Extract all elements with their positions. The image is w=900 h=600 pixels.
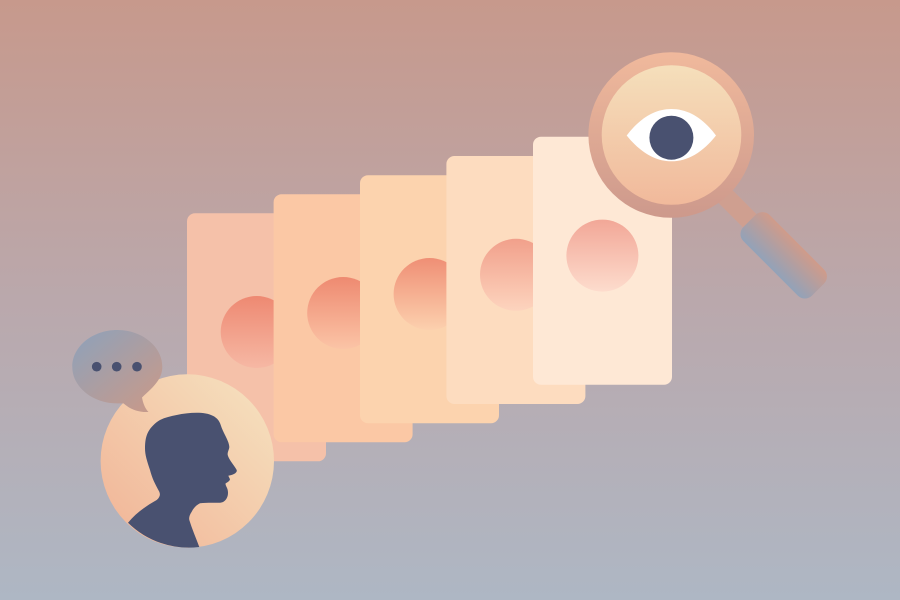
- icon: person avatar: [101, 374, 274, 548]
- magnifier lens: [602, 65, 741, 205]
- card 4: [446, 156, 585, 404]
- icon: eye: [627, 109, 716, 161]
- icon: magnifying glass: [588, 52, 831, 303]
- magnifier handle stem: [717, 188, 773, 244]
- card 2: [274, 194, 413, 442]
- bubble body: [72, 330, 162, 412]
- avatar circle: [101, 374, 274, 548]
- magnifier grip: [736, 208, 831, 303]
- head silhouette: [128, 413, 237, 548]
- magnifier ring: [588, 52, 754, 218]
- card 1: [187, 213, 326, 461]
- card 5: [533, 137, 672, 385]
- speech bubble: [72, 330, 162, 412]
- bubble dots: [92, 362, 142, 372]
- card 3: [360, 175, 499, 423]
